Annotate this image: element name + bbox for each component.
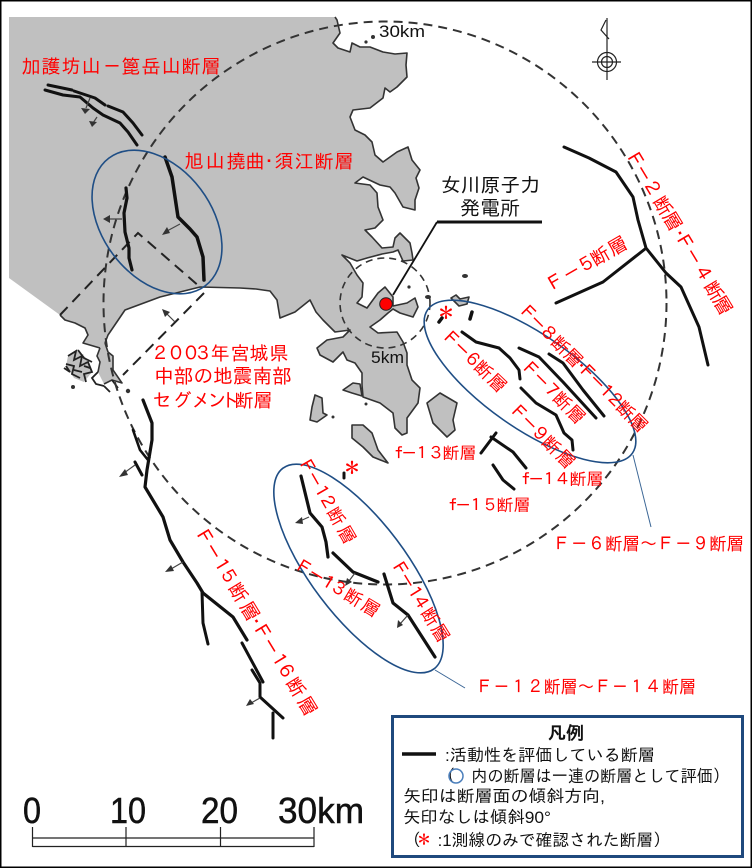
faults: F-12, F-13, F-14 <box>295 473 435 657</box>
label: F-13 fault: Ｆ－１３断層 <box>291 555 383 621</box>
ellipse: F-12 to F-14 group <box>245 439 472 698</box>
label: F-5 fault: Ｆ－５断層 <box>542 233 632 297</box>
faults: Kagobo-yama to Nonodake-yama <box>45 85 142 145</box>
legend: no-arrow description: 矢印なしは傾斜90° <box>403 808 551 827</box>
legend title: 凡例 <box>548 723 584 743</box>
label: f-14 fault: ｆ－１４断層 <box>518 470 604 489</box>
label: 30km: 30km <box>379 22 425 41</box>
label: Onagawa nuclear power station: 女川原子力 <box>441 175 540 197</box>
label: 2003 Miyagi earthquake southern segment fault: 中部の地震南部 <box>154 366 292 388</box>
label: F-15 and F-16 faults: Ｆ－１５断層･Ｆ－１６断層 <box>190 524 320 720</box>
scale bar: 0 <box>23 790 41 831</box>
label: F-8 and F-12 faults: Ｆ－８断層･Ｆ－１２断層 <box>514 299 652 437</box>
label: Asahiyama flexure and Sue fault: 旭山撓曲･須江断層 <box>184 151 354 173</box>
power plant marker and leader <box>380 222 542 310</box>
scale bar: 30km <box>278 790 364 831</box>
label: Kagobo-yama to Nonodake-yama fault: 加護坊山－篦岳山断層 <box>22 57 220 78</box>
leader line: F-12 to F-14 callout <box>435 670 465 688</box>
label: F-6 to F-9 faults callout: Ｆ－６断層～Ｆ－９断層 <box>553 534 744 554</box>
label: F-12 to F-14 faults callout: Ｆ－１２断層～Ｆ－１４断層 <box>476 677 696 697</box>
faults: F-6 to F-9 <box>439 312 604 450</box>
legend: asterisk description: （ :1測線のみで確認された断層） <box>404 831 670 850</box>
30 km radius circle <box>104 22 666 584</box>
label: 2003 Miyagi earthquake southern segment fault <box>150 344 292 412</box>
land: Matsushima bay coast detail <box>64 343 130 393</box>
5 km radius circle <box>340 258 430 348</box>
label: F-14 fault: Ｆ－１４断層 <box>387 556 453 646</box>
fault: 2003 Miyagi earthquake southern segment <box>60 233 204 375</box>
label: 2003 Miyagi earthquake southern segment fault: ２００３年宮城県 <box>150 344 288 365</box>
label: F-7 fault: Ｆ－７断層 <box>517 356 589 428</box>
scale bar <box>23 790 364 847</box>
legend: asterisk description: ＊ <box>416 830 432 850</box>
label: F-2 and F-4 faults: Ｆ－２断層･Ｆ－４断層 <box>620 147 736 319</box>
legend box <box>392 716 742 856</box>
legend: fault description: :活動性を評価している断層 <box>445 746 655 765</box>
label: F-9 fault: Ｆ－９断層 <box>505 399 579 473</box>
asterisk: fault confirmed on one survey line: ＊ <box>436 303 456 325</box>
islands <box>310 35 469 463</box>
land: mainland and peninsulas <box>9 17 420 435</box>
scale bar: 20 <box>201 790 238 831</box>
leader line: F-6 to F-9 callout <box>633 455 651 527</box>
faults: F-15 and F-16 <box>119 400 283 738</box>
label: Onagawa nuclear power station <box>441 175 540 220</box>
label: f-13 fault: ｆ－１３断層 <box>390 444 476 463</box>
label: 2003 Miyagi earthquake southern segment fault: セグメント断層 <box>152 391 272 412</box>
scale bar: 10 <box>110 790 146 831</box>
label: 5km: 5km <box>371 348 404 367</box>
ellipse: F-6 to F-9 group <box>401 272 659 491</box>
label: Onagawa nuclear power station: 発電所 <box>460 198 520 220</box>
label: F-6 fault: Ｆ－６断層 <box>438 325 510 397</box>
faults: f-13, f-14, f-15 <box>481 433 526 489</box>
faults: Asahiyama flexure and Sue fault <box>103 157 204 280</box>
legend: fault line sample <box>402 752 436 756</box>
legend: arrow description: 矢印は断層面の傾斜方向, <box>403 787 605 806</box>
label: f-15 fault: ｆ－１５断層 <box>444 496 530 515</box>
legend: ellipse description: （ 内の断層は一連の断層として評価） <box>439 767 729 786</box>
asterisk: fault confirmed on one survey line: ＊ <box>342 458 362 480</box>
compass north arrow <box>592 18 621 80</box>
label: F-12 fault: Ｆ－１２断層 <box>294 454 360 548</box>
ellipse: Asahiyama group <box>65 125 249 319</box>
faults: F-2, F-4 and F-5 <box>556 147 708 365</box>
